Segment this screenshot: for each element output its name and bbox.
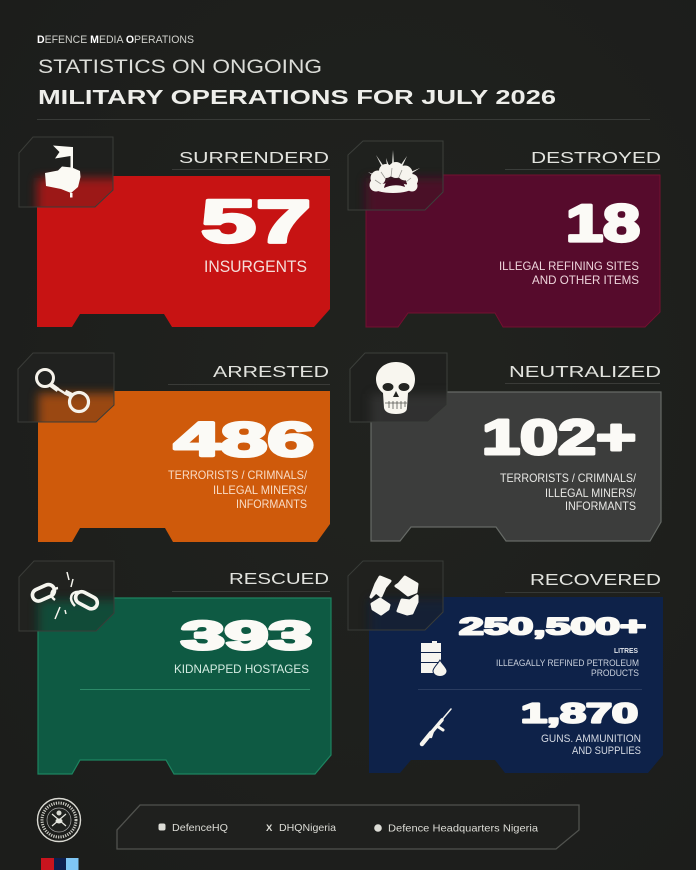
heading: NEUTRALIZED (509, 364, 661, 381)
heading: SURRENDERD (179, 150, 329, 167)
icon frame (366, 597, 442, 630)
label: INFORMANTS (565, 499, 636, 513)
panel: arrested (15, 350, 330, 542)
label: ILLEGAL MINERS/ (213, 483, 308, 497)
panel shape (369, 597, 663, 773)
icon frame (362, 174, 442, 210)
title line one: STATISTICS ON ONGOING (38, 56, 322, 78)
value: 102+ (482, 411, 636, 465)
label (499, 259, 639, 287)
label: ILLEGAL REFINING SITES (499, 259, 639, 273)
value: 393 (181, 614, 312, 658)
handle: instagram: DefenceHQ (172, 822, 228, 834)
heading: ARRESTED (213, 364, 329, 381)
icon: x: X (266, 823, 273, 834)
icon: broken chain (31, 572, 99, 619)
heading: RESCUED (229, 571, 329, 588)
icon: instagram (158, 824, 166, 830)
heading: RECOVERED (530, 572, 661, 589)
value: litres: 250,500+ (459, 614, 646, 640)
label (500, 471, 637, 513)
unit: LITRES (614, 648, 638, 655)
panel shape (371, 392, 661, 541)
panel shape (38, 598, 331, 774)
icon: oil barrel (421, 641, 447, 676)
organisation name: DEFENCE MEDIA OPERATIONS (37, 34, 194, 46)
label: petroleum: ILLEAGALLY REFINED PETROLEUM (496, 658, 639, 669)
label: AND OTHER ITEMS (532, 273, 639, 287)
panel: destroyed (345, 138, 661, 327)
title line two: MILITARY OPERATIONS FOR JULY 2026 (38, 87, 556, 109)
label: petroleum (496, 658, 639, 679)
value: 18 (566, 195, 640, 253)
label: guns: AND SUPPLIES (572, 745, 641, 757)
heading: DESTROYED (531, 150, 661, 167)
panel shape (38, 391, 330, 542)
icon frame (32, 594, 114, 630)
label: petroleum: PRODUCTS (591, 668, 639, 679)
label (168, 468, 308, 511)
value: guns: 1,870 (521, 698, 638, 728)
bar frame (117, 805, 579, 849)
social media bar (117, 805, 579, 849)
handle: facebook: Defence Headquarters Nigeria (388, 822, 538, 834)
label: TERRORISTS / CRIMNALS/ (500, 471, 637, 485)
value: 57 (201, 188, 311, 255)
panel: recovered (345, 558, 663, 773)
label: guns: GUNS. AMMUNITION (541, 733, 641, 745)
icon frame (30, 170, 112, 206)
icon: rifle (422, 709, 451, 744)
handle: x: DHQNigeria (279, 822, 336, 834)
panel shape (366, 175, 660, 327)
header (37, 34, 556, 109)
icon: flag and fist (45, 146, 80, 198)
icon: facebook (374, 824, 382, 832)
label: TERRORISTS / CRIMNALS/ (168, 468, 308, 482)
flag stripes (41, 858, 78, 870)
panel: neutralized (345, 350, 661, 541)
label: INFORMANTS (236, 497, 307, 511)
panel shape (37, 176, 330, 327)
panel: surrendered (15, 135, 330, 327)
label: ILLEGAL MINERS/ (545, 486, 637, 500)
icon: explosion (368, 150, 420, 193)
panel: rescued (15, 558, 331, 774)
label: guns (541, 733, 641, 757)
icon: handcuffs (36, 370, 88, 412)
icon: skull (376, 362, 415, 414)
value: 486 (174, 414, 314, 467)
icon frame (370, 391, 446, 422)
emblem (38, 798, 80, 842)
label: KIDNAPPED HOSTAGES (174, 662, 309, 676)
icon frame (30, 386, 114, 422)
label: INSURGENTS (204, 258, 307, 276)
icon: recycle arrows (371, 577, 417, 614)
